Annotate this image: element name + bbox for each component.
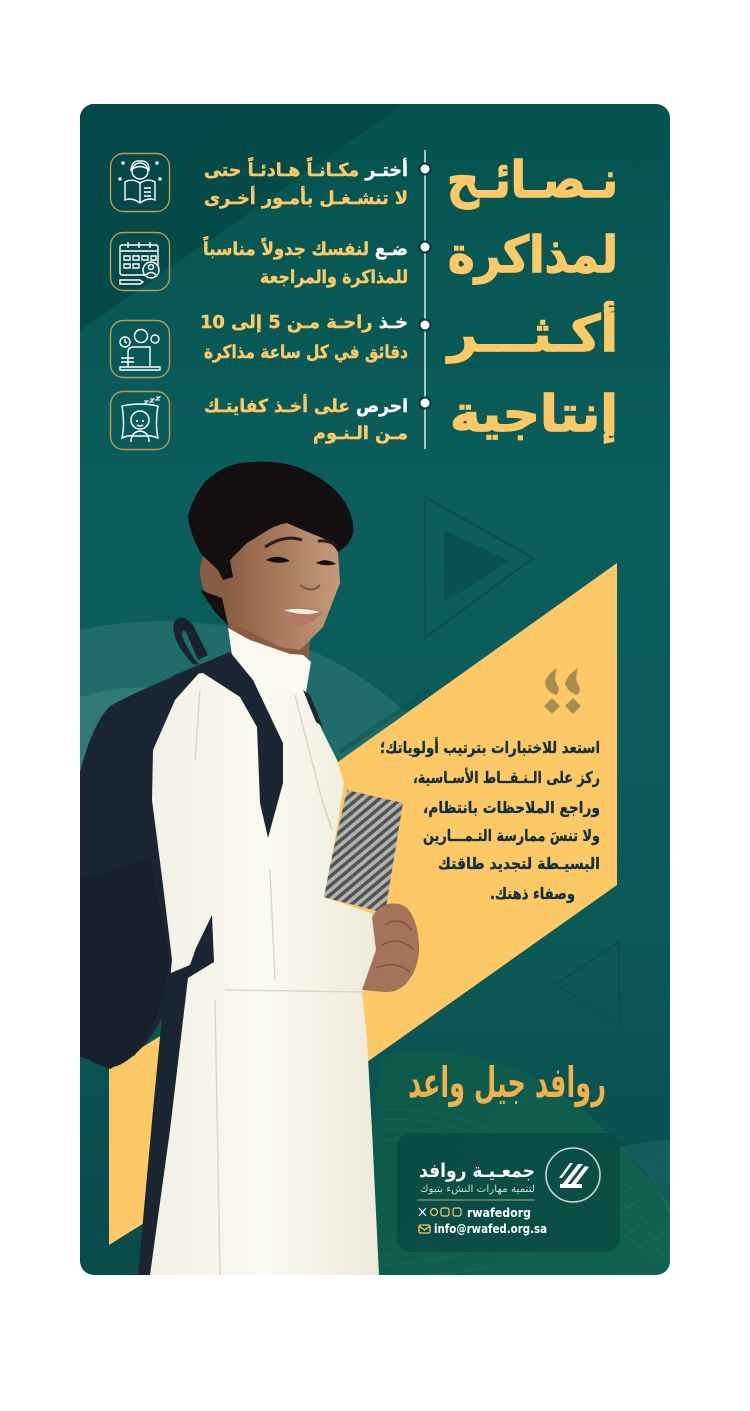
boy figure: [80, 462, 419, 1275]
yellow triangle panel: [300, 563, 617, 1062]
organisation tagline: لتنمية مهارات النشء بتبوك: [420, 1184, 535, 1195]
hair: [188, 462, 353, 625]
tip 2 text: [203, 236, 408, 288]
title: أكـثـــر: [445, 301, 618, 364]
quote text: ولا تنسَ ممارسة التـمـــارين: [423, 826, 600, 845]
far strap: [303, 690, 323, 727]
logo: [546, 1148, 600, 1202]
yellow lower-left shape: [109, 1030, 170, 1245]
calligraphy slogan: روافد جيل واعد: [408, 1058, 606, 1108]
title: نـصـائـح: [447, 151, 618, 210]
title: لمذاكرة: [448, 226, 618, 285]
tip 2 text: ضـع لنفسك جدولاً مناسباً: [203, 236, 408, 260]
triangle outline: small: [556, 942, 619, 1026]
neck: [228, 624, 310, 660]
book: [323, 790, 403, 913]
social icons: [419, 1208, 461, 1216]
email: info@rwafed.org.sa: [434, 1221, 547, 1236]
tip 1 text: [204, 157, 408, 209]
tip 3 text: دقائق في كل ساعة مذاكرة: [204, 342, 408, 363]
quote text: استعد للاختبارات بترتيب أولوياتك؛: [380, 737, 600, 757]
collar: [228, 628, 311, 670]
triangle outline: play: [425, 497, 533, 638]
tip 1 text: أختـر مكـانـاً هـادئـاً حتى: [204, 157, 408, 181]
eyes and brows: [265, 538, 337, 565]
organisation name: جمعـيـة روافد: [419, 1160, 535, 1182]
divider: [417, 1199, 535, 1201]
tip 4 text: [204, 394, 408, 444]
icon: reading student: [110, 154, 170, 212]
title: إنتاجية: [450, 385, 618, 444]
tip 2 text: للمذاكرة والمراجعة: [260, 267, 408, 288]
icon: envelope: [419, 1225, 430, 1233]
card background: [80, 104, 670, 1275]
quote text: وصفاء ذهنك.: [490, 884, 575, 903]
quote text: وراجع الملاحظات بانتظام،: [423, 798, 600, 817]
ear: [200, 556, 212, 594]
quote text: ركز على الـنـقــاط الأسـاسية،: [413, 768, 600, 787]
tip 4 text: احرص على أخـذ كفايتـك: [204, 394, 408, 417]
tip 3 text: خـذ راحـة مـن 5 إلى 10: [200, 312, 408, 333]
tip 1 text: لا تنشـغـل بأمـور أخـرى: [204, 186, 408, 209]
tip 4 text: مـن الـنـوم: [313, 423, 408, 444]
icon: break at laptop: [110, 320, 170, 378]
quote text: [380, 737, 600, 903]
quote text: البسيـطة لتجديد طاقتك: [438, 854, 600, 873]
thobe: [148, 628, 379, 1275]
shoulder strap: [170, 652, 283, 838]
quote mark: [544, 668, 581, 714]
icon: sleeping: [110, 392, 170, 450]
backpack: [80, 618, 215, 1069]
icon: calendar: [110, 232, 170, 290]
contact panel: [397, 1133, 620, 1252]
title: [445, 151, 618, 444]
hands: [362, 904, 419, 992]
tip 3 text: [200, 312, 408, 363]
face: [200, 523, 340, 650]
lower strap: [138, 915, 214, 1275]
social handle: rwafedorg: [467, 1205, 531, 1220]
mouth: [279, 585, 323, 625]
timeline: [420, 150, 430, 449]
